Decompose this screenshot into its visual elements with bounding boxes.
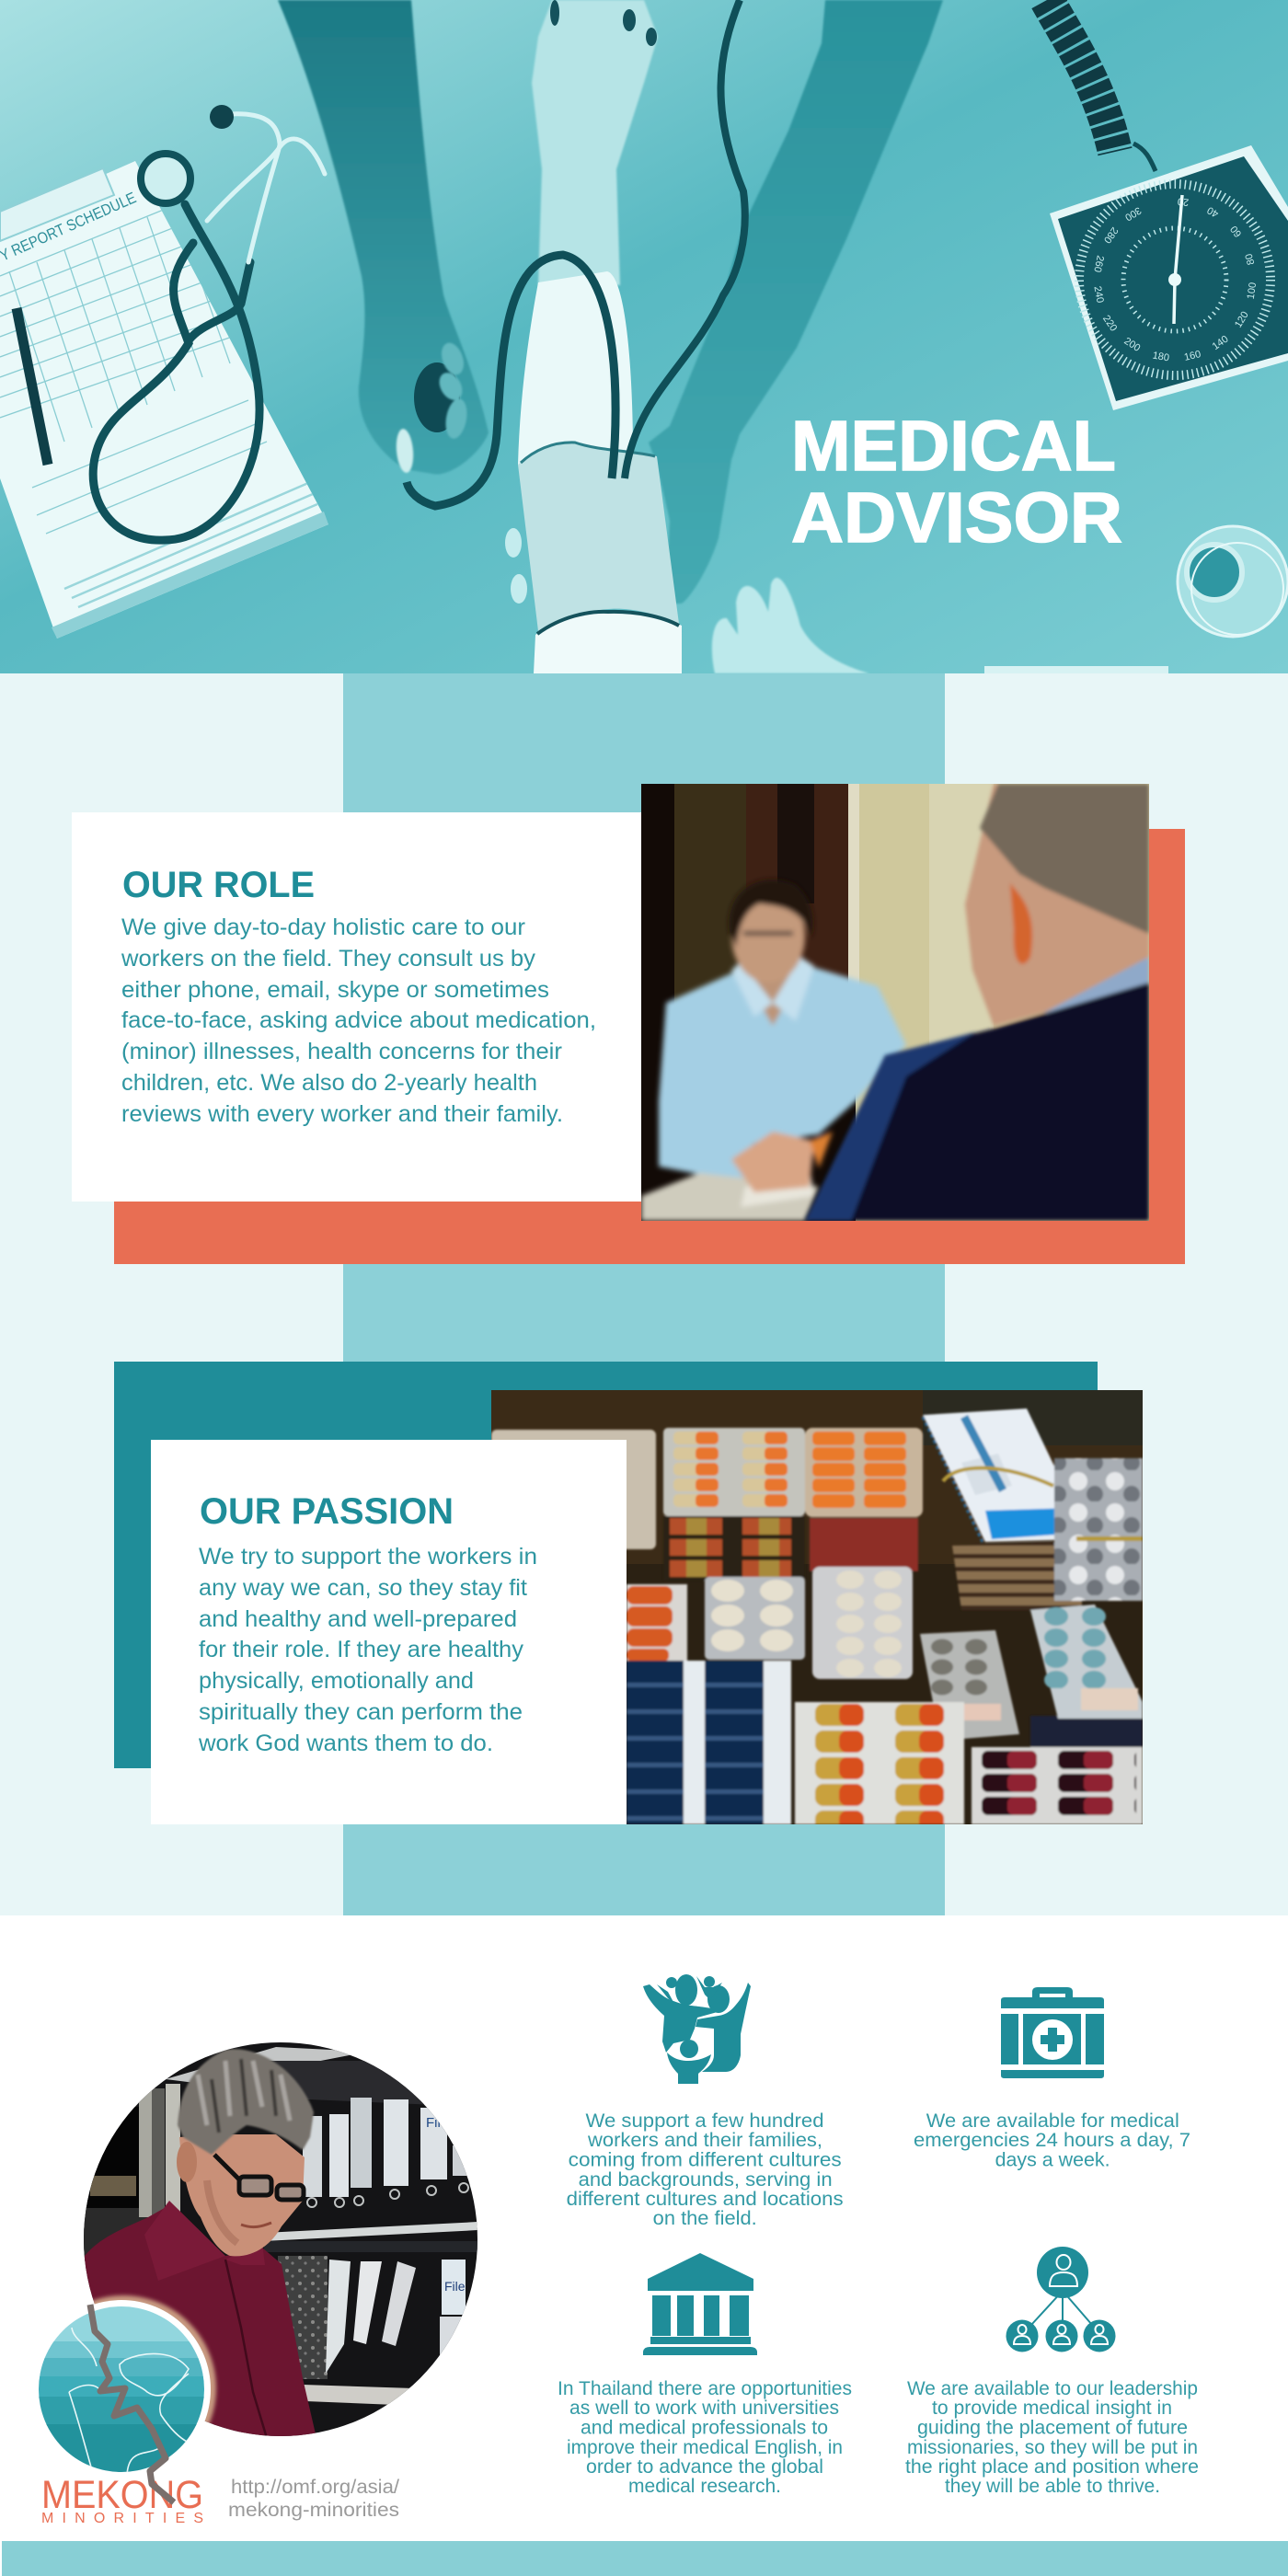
top row binders bbox=[303, 2098, 468, 2197]
grey hair bbox=[178, 2049, 314, 2155]
pressure gauge: 140 bbox=[1211, 334, 1231, 352]
title bbox=[791, 420, 1122, 543]
lower shelf bbox=[303, 2385, 414, 2405]
title: MEDICAL bbox=[791, 407, 1116, 486]
portrait photo in circle bbox=[30, 2042, 479, 2481]
pressure gauge: 180 bbox=[1152, 350, 1170, 363]
man in maroon shirt bbox=[85, 2205, 316, 2438]
logo: Mekong Minorities: MINORITIES bbox=[41, 2511, 203, 2526]
pressure gauge: 220 bbox=[1100, 314, 1119, 334]
clipboard with report schedule: Y REPORT SCHEDULE bbox=[0, 189, 139, 265]
clipboard with report schedule bbox=[0, 161, 328, 638]
text: emergencies: We are available for medical bbox=[926, 2110, 1179, 2132]
shirt collar and placket bbox=[144, 2201, 265, 2281]
text: leadership: missionaries, so they will be put in bbox=[907, 2437, 1198, 2458]
text: research in Thailand: order to advance the global bbox=[586, 2456, 823, 2478]
hands bbox=[731, 1132, 814, 1192]
glass bbox=[1178, 526, 1288, 637]
dark capsule blister bbox=[972, 1747, 1143, 1824]
central teal strip bbox=[343, 673, 945, 1915]
website link: mekong-minorities bbox=[228, 2500, 399, 2521]
blood pressure tubes bbox=[407, 0, 745, 506]
patient fingers behind cuff bbox=[505, 528, 527, 604]
role description text: face-to-face, asking advice about medication, bbox=[121, 1007, 596, 1033]
marble binder bbox=[278, 2256, 328, 2379]
passion description text: any way we can, so they stay fit bbox=[199, 1575, 527, 1601]
role description text: workers on the field. They consult us by bbox=[121, 946, 536, 972]
role description text: either phone, email, skype or sometimes bbox=[121, 977, 549, 1003]
shelf bbox=[264, 2222, 478, 2241]
text: support workers: We support a few hundred bbox=[585, 2110, 824, 2132]
photo: medicine blister packs bbox=[491, 1390, 1143, 1824]
pressure gauge bbox=[1050, 145, 1288, 410]
patient forearm and hand bbox=[532, 0, 658, 285]
website link bbox=[228, 2477, 399, 2521]
text: support workers: and backgrounds, serving in bbox=[579, 2169, 833, 2191]
logo glow on shirt bbox=[30, 2295, 216, 2481]
passion description text: work God wants them to do. bbox=[198, 1731, 493, 1756]
text: support workers bbox=[567, 2110, 844, 2229]
hero photo: medical check-up bbox=[0, 0, 1288, 673]
bottom hand bbox=[712, 578, 869, 673]
logo map bands bbox=[37, 2305, 207, 2476]
text: leadership: guiding the placement of future bbox=[917, 2418, 1188, 2438]
text: research in Thailand: and medical professionals to bbox=[581, 2418, 828, 2438]
Mekong river bbox=[90, 2305, 174, 2502]
text: support workers: workers and their families, bbox=[587, 2130, 822, 2151]
text: support workers: coming from different cultures bbox=[569, 2149, 842, 2171]
heading: our passion: OUR PASSION bbox=[200, 1491, 454, 1532]
coral backing block bbox=[114, 829, 1185, 1264]
neck and face bbox=[179, 2134, 305, 2256]
passion description text: and healthy and well-prepared bbox=[199, 1606, 517, 1632]
icon: first aid kit bbox=[1001, 1987, 1104, 2078]
pressure gauge: 120 bbox=[1233, 310, 1251, 329]
role description text: We give day-to-day holistic care to our bbox=[121, 914, 525, 940]
lower row binders bbox=[326, 2260, 466, 2374]
website link: http://omf.org/asia/ bbox=[231, 2477, 399, 2498]
text: emergencies bbox=[914, 2110, 1190, 2171]
text: leadership: the right place and position where bbox=[905, 2456, 1199, 2478]
stethoscope ear tip bbox=[210, 105, 234, 129]
mouth and nose shading bbox=[241, 2223, 271, 2227]
white text card bbox=[72, 812, 642, 1202]
pump bulb bbox=[414, 362, 460, 432]
text: research in Thailand bbox=[558, 2378, 852, 2497]
left arm and hand bbox=[278, 0, 489, 475]
text: emergencies: days a week. bbox=[995, 2149, 1110, 2171]
pen bbox=[17, 308, 48, 465]
capsule blister bottom bbox=[795, 1702, 964, 1824]
pressure gauge: 260 bbox=[1091, 255, 1106, 273]
striped collar bbox=[1040, 957, 1149, 1030]
top row binders: File bbox=[426, 2115, 448, 2131]
lower row binders: File bbox=[444, 2279, 466, 2294]
text: leadership bbox=[905, 2378, 1199, 2497]
pressure gauge: 280 bbox=[1101, 224, 1120, 245]
footer band bbox=[2, 2541, 1288, 2576]
pressure gauge: 80 bbox=[1244, 252, 1257, 266]
role description text: reviews with every worker and their family. bbox=[121, 1101, 563, 1127]
passion description text bbox=[198, 1544, 537, 1756]
white text card bbox=[151, 1440, 627, 1824]
logo: Mekong Minorities bbox=[32, 2300, 211, 2526]
passion description text: for their role. If they are healthy bbox=[199, 1637, 524, 1662]
gray tablet blister bbox=[920, 1630, 1019, 1741]
pressure gauge: 20 bbox=[1177, 195, 1190, 208]
stethoscope bbox=[93, 114, 325, 540]
role description text bbox=[121, 914, 596, 1127]
pressure gauge: 300 bbox=[1123, 204, 1143, 223]
right arm and hand bbox=[649, 0, 943, 604]
panel: our passion bbox=[114, 1362, 1143, 1824]
text: leadership: they will be able to thrive. bbox=[945, 2476, 1160, 2497]
icon: leadership hierarchy bbox=[1006, 2247, 1115, 2352]
seated man in blue shirt bbox=[659, 967, 906, 1183]
white sleeve bbox=[518, 271, 633, 465]
text: research in Thailand: improve their medical English, in bbox=[567, 2437, 843, 2458]
text: support workers: different cultures and locations bbox=[567, 2189, 844, 2210]
heading: our role: OUR ROLE bbox=[122, 865, 315, 905]
photo: consultation bbox=[641, 784, 1149, 1221]
blood pressure cuff bbox=[518, 443, 679, 631]
text: research in Thailand: as well to work with universities bbox=[569, 2398, 839, 2419]
lower sleeve bbox=[534, 612, 682, 673]
title: ADVISOR bbox=[791, 478, 1122, 558]
pale middle background bbox=[0, 673, 1288, 1915]
text: support workers: on the field. bbox=[653, 2208, 757, 2229]
fingers on pump bbox=[395, 339, 470, 474]
text: research in Thailand: medical research. bbox=[628, 2476, 781, 2497]
navy capsule blister bbox=[627, 1661, 791, 1824]
pressure gauge: 100 bbox=[1246, 282, 1259, 300]
text: research in Thailand: In Thailand there are opportunities bbox=[558, 2378, 852, 2399]
sheet corner bbox=[984, 666, 1168, 673]
teal tablet blister bbox=[1030, 1716, 1143, 1757]
ear bbox=[177, 2142, 197, 2182]
pressure gauge: 240 bbox=[1091, 285, 1106, 304]
round tablet blister packs bbox=[705, 1577, 805, 1660]
pressure gauge: 40 bbox=[1205, 204, 1221, 219]
pressure gauge: 200 bbox=[1121, 336, 1142, 354]
patient fingernails bbox=[550, 0, 657, 46]
glasses bbox=[214, 2155, 304, 2200]
passion description text: physically, emotionally and bbox=[199, 1668, 474, 1694]
table and papers bbox=[641, 1173, 819, 1221]
text: emergencies: emergencies 24 hours a day, 7 bbox=[914, 2130, 1190, 2151]
pressure gauge: 160 bbox=[1183, 349, 1202, 363]
pressure gauge: 60 bbox=[1228, 224, 1244, 239]
logo wordmark: MEKONG bbox=[41, 2473, 203, 2517]
coil cord bbox=[1047, 0, 1156, 171]
icon: family bbox=[643, 1974, 751, 2084]
text: leadership: to provide medical insight in bbox=[932, 2398, 1172, 2419]
navy sweater bbox=[805, 983, 1149, 1221]
panel: our role bbox=[72, 784, 1185, 1264]
passion description text: spiritually they can perform the bbox=[199, 1699, 523, 1725]
icon: university building bbox=[643, 2253, 757, 2355]
role description text: (minor) illnesses, health concerns for their bbox=[121, 1039, 562, 1064]
text: leadership: We are available to our leadership bbox=[907, 2378, 1198, 2399]
passion description text: We try to support the workers in bbox=[199, 1544, 537, 1570]
teal backing block bbox=[114, 1362, 1098, 1768]
older man from behind bbox=[965, 784, 1149, 1026]
white bottom section bbox=[0, 1915, 1288, 2541]
binder rings bbox=[307, 2183, 468, 2207]
role description text: children, etc. We also do 2-yearly health bbox=[121, 1070, 537, 1096]
notebook stack bbox=[923, 1409, 1089, 1542]
